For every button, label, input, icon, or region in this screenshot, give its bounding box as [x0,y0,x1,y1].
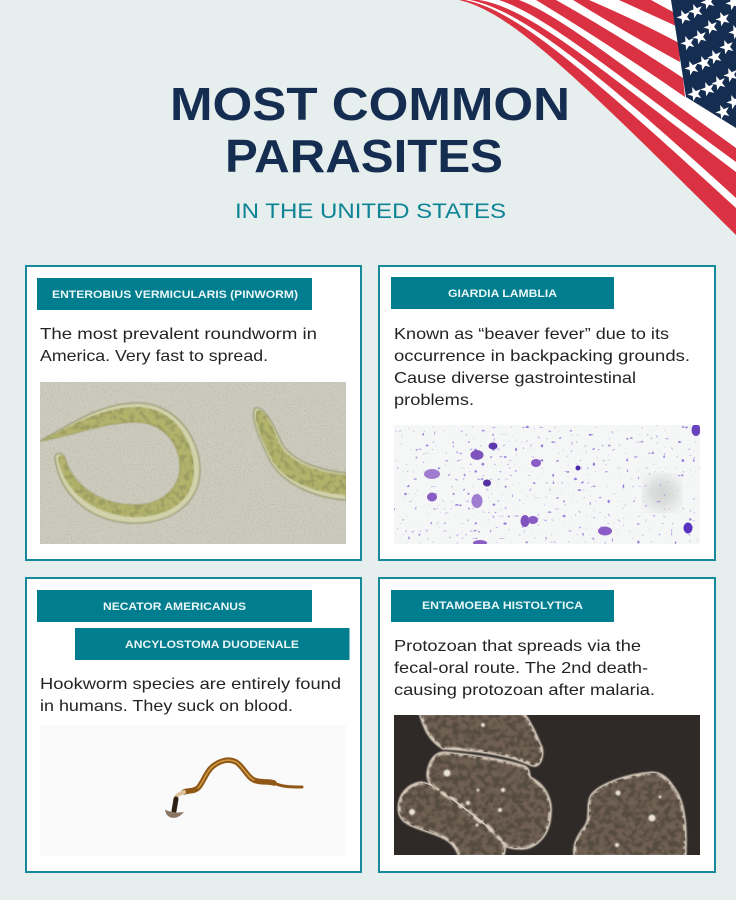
text: hookworm description [40,676,341,715]
label: Necator americanus [37,590,312,622]
text: giardia description [394,326,690,409]
title: MOST COMMON [170,78,570,130]
text: pinworm description: The most prevalent roundworm in [40,326,317,343]
photo: hookworm [40,725,346,856]
text: entamoeba description [394,638,655,699]
label: Giardia lamblia [391,277,614,309]
photo: giardia stained slide [394,424,700,546]
subtitle: IN THE UNITED STATES [235,200,506,223]
text: giardia description: Cause diverse gastrointestinal [394,370,636,387]
title [170,78,570,182]
text: entamoeba description: fecal-oral route. The 2nd death- [394,660,648,677]
text: pinworm description: America. Very fast to spread. [40,348,268,365]
label: Entamoeba histolytica: ENTAMOEBA HISTOLYTICA [422,600,583,612]
text: hookworm description: Hookworm species are entirely found [40,676,341,693]
text: pinworm description [40,326,317,365]
text: hookworm description: in humans. They suck on blood. [40,698,293,715]
label: Enterobius vermicularis: ENTEROBIUS VERMICULARIS (PINWORM) [52,289,298,301]
icon: American flag corner [459,0,736,235]
text: entamoeba description: causing protozoan after malaria. [394,682,655,699]
label: Ancylostoma duodenale: ANCYLOSTOMA DUODENALE [125,639,299,651]
label: Giardia lamblia: GIARDIA LAMBLIA [448,288,557,300]
text: giardia description: Known as “beaver fever” due to its [394,326,669,343]
label: Necator americanus: NECATOR AMERICANUS [103,601,246,613]
panel: Enterobius vermicularis [26,266,361,560]
label: Ancylostoma duodenale [75,628,350,660]
panel: Entamoeba histolytica [379,578,715,872]
text: giardia description: problems. [394,392,474,409]
text: giardia description: occurrence in backpacking grounds. [394,348,690,365]
label: Enterobius vermicularis [37,278,312,310]
label: Entamoeba histolytica [391,590,614,622]
text: entamoeba description: Protozoan that spreads via the [394,638,641,655]
title: PARASITES [225,130,503,182]
panel: Necator americanus and Ancylostoma duodenale [26,578,361,872]
panel: Giardia lamblia [379,266,715,560]
photo: amoeba cells [394,713,700,857]
photo: pinworms under microscope [40,382,346,544]
